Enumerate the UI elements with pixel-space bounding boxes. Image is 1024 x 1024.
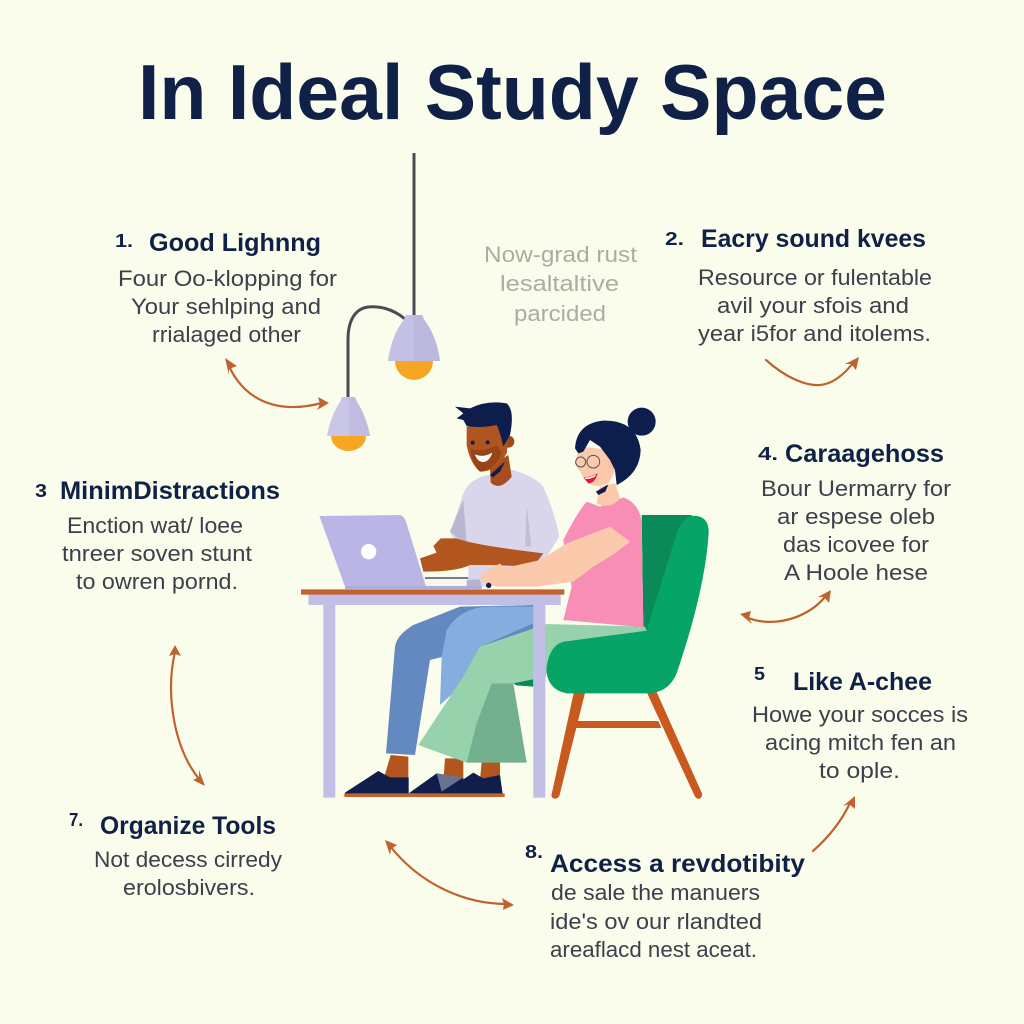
- body 5: [752, 702, 968, 783]
- faded note: parcided: [514, 301, 606, 326]
- callout 7: [69, 810, 282, 900]
- body 3: tnreer soven stunt: [62, 541, 252, 566]
- body 2: Resource or fulentable: [698, 265, 932, 290]
- man shirt: [450, 469, 559, 587]
- man neck: [490, 455, 512, 486]
- title: In Ideal Study Space: [138, 48, 887, 136]
- body 4: das icovee for: [783, 532, 929, 557]
- callout 1: [115, 229, 337, 347]
- heading 4: Caraagehoss: [785, 440, 944, 468]
- man: [344, 402, 559, 797]
- body 4: ar espese oleb: [777, 504, 935, 529]
- heading 1: Good Lighnng: [149, 229, 321, 257]
- number 2: 2.: [665, 229, 684, 249]
- callout 8: [525, 842, 805, 962]
- woman: [418, 408, 656, 763]
- arrow: towards chair: [740, 590, 831, 624]
- body 5: to ople.: [819, 758, 900, 783]
- number 1: 1.: [115, 231, 133, 251]
- woman arm: [480, 527, 630, 587]
- callout 3: [35, 477, 280, 594]
- woman head: [575, 447, 617, 486]
- arrow: left vertical: [169, 645, 205, 786]
- body 7: [94, 847, 282, 900]
- chair: [512, 515, 709, 799]
- faded note: Now-grad rust: [484, 242, 637, 267]
- body 3: Enction wat/ loee: [67, 513, 243, 538]
- body 8: areaflacd nest aceat.: [550, 937, 757, 962]
- heading 3: MinimDistractions: [60, 477, 280, 505]
- callout 4: [758, 440, 951, 585]
- desk: [301, 589, 564, 798]
- lamp cords: [348, 153, 414, 397]
- number 3: 3: [35, 481, 47, 501]
- number 8: 8.: [525, 842, 543, 862]
- body 7: Not decess cirredy: [94, 847, 282, 872]
- man forearm: [420, 538, 543, 572]
- woman pants: [418, 624, 647, 763]
- heading 2: Eacry sound kvees: [701, 225, 926, 253]
- body 7: erolosbivers.: [123, 875, 255, 900]
- woman shirt: [563, 497, 643, 627]
- body 1: Four Oo-klopping for: [118, 266, 337, 291]
- callout 2: [665, 225, 932, 346]
- body 1: rrialaged other: [152, 322, 301, 347]
- body 4: Bour Uermarry for: [761, 476, 951, 501]
- body 8: [550, 880, 762, 962]
- man pants: [386, 605, 533, 755]
- body 3: to owren pornd.: [76, 569, 238, 594]
- body 3: [62, 513, 252, 594]
- heading 5: Like A-chee: [793, 668, 932, 696]
- illustration: two students at a desk: [301, 402, 709, 799]
- laptop and notebook: [319, 515, 543, 589]
- man feet: [383, 755, 408, 780]
- body 8: de sale the manuers: [551, 880, 760, 905]
- arrow: sound curve: [766, 357, 859, 385]
- body 2: avil your sfois and: [717, 293, 909, 318]
- body 1: [118, 266, 337, 347]
- arrow: towards callout 5: [813, 796, 855, 851]
- heading 8: Access a revdotibity: [550, 850, 805, 878]
- arrow: lighting to lamp: [225, 358, 329, 410]
- body 4: [761, 476, 951, 585]
- body 1: Your sehlping and: [131, 294, 321, 319]
- man head: [502, 436, 514, 448]
- body 5: acing mitch fen an: [765, 730, 956, 755]
- heading 7: Organize Tools: [100, 812, 276, 840]
- body 5: Howe your socces is: [752, 702, 968, 727]
- illustration: pendant lamps: [327, 153, 440, 451]
- arrow: bottom curve: [385, 840, 514, 910]
- number 5: 5: [754, 664, 765, 684]
- faded note: lesaltaltive: [500, 271, 619, 296]
- body 4: A Hoole hese: [784, 560, 928, 585]
- body 2: [698, 265, 932, 346]
- woman neck: [597, 483, 620, 506]
- number 7: 7.: [69, 810, 83, 830]
- icon: small lamp: [327, 397, 370, 451]
- body 2: year i5for and itolems.: [698, 321, 931, 346]
- body 8: ide's ov our rlandted: [550, 909, 762, 934]
- icon: large lamp: [388, 315, 440, 380]
- number 4: 4.: [758, 444, 778, 464]
- faded note: [484, 242, 637, 326]
- callout 5: [752, 664, 968, 783]
